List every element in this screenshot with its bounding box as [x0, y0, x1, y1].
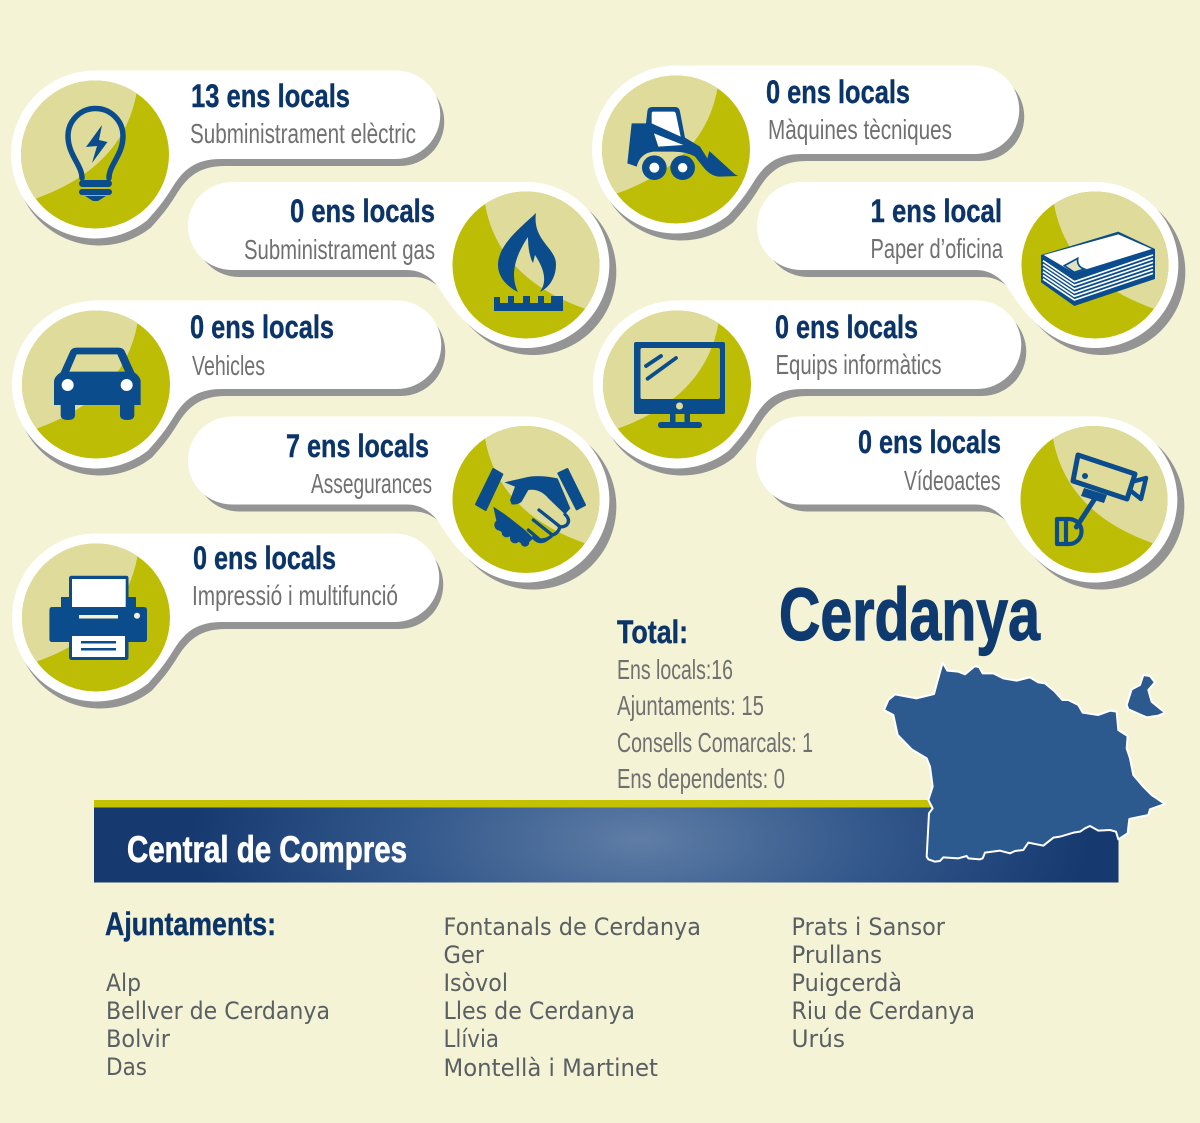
label: Vídeoactes — [904, 465, 1000, 496]
panel: subministrament elèctric — [11, 70, 444, 246]
banner title: Central de Compres — [127, 829, 407, 870]
icon: paper stack — [1041, 232, 1155, 306]
heading: 13 ens locals — [191, 78, 350, 114]
panel: vídeoactes — [756, 416, 1184, 589]
panel: equips informàtics — [593, 300, 1026, 476]
municipalities column 3: Prullans — [792, 941, 882, 969]
bubble shape — [12, 300, 445, 476]
label: Equips informàtics — [776, 349, 942, 380]
region title: Cerdanya — [779, 573, 1041, 656]
icon: loader machine — [627, 107, 738, 180]
label: Impressió i multifunció — [192, 580, 398, 611]
municipalities column 1: Das — [106, 1053, 147, 1081]
municipalities column 2: Montellà i Martinet — [444, 1054, 658, 1082]
municipalities column 1 — [106, 969, 330, 1081]
municipalities column 3: Riu de Cerdanya — [792, 997, 975, 1025]
bubble shape — [12, 534, 443, 708]
map of Cerdanya — [884, 663, 1165, 862]
municipalities column 2: Ger — [444, 941, 484, 969]
icon: computer monitor — [634, 342, 725, 428]
bubble shape — [188, 182, 616, 355]
municipalities column 1: Bellver de Cerdanya — [106, 997, 330, 1025]
total: consells comarcals: Consells Comarcals: 1 — [617, 727, 813, 758]
municipalities column 3: Puigcerdà — [792, 969, 902, 997]
heading: 0 ens locals — [858, 424, 1001, 460]
heading: 0 ens locals — [193, 540, 336, 576]
municipalities column 1: Bolvir — [106, 1025, 170, 1053]
icon: video camera — [1057, 455, 1146, 544]
heading: 0 ens locals — [766, 74, 910, 110]
icon: gas flame — [494, 213, 563, 311]
bubble shape — [592, 66, 1024, 241]
banner: central de compres — [94, 800, 1118, 882]
municipalities column 2 — [444, 913, 701, 1082]
total: ens locals: Ens locals:16 — [617, 654, 733, 685]
label: Subministrament elèctric — [190, 118, 416, 149]
totals block — [617, 614, 813, 794]
panel: subministrament gas — [188, 182, 616, 355]
list heading: Ajuntaments: — [105, 906, 276, 942]
municipalities column 2: Fontanals de Cerdanya — [444, 913, 701, 941]
label: Màquines tècniques — [768, 114, 952, 145]
municipalities column 3: Prats i Sansor — [792, 913, 945, 941]
panel: assegurances — [188, 416, 616, 589]
heading: 0 ens locals — [290, 193, 435, 229]
bubble shape — [757, 182, 1185, 355]
panel: paper d'oficina — [757, 182, 1185, 355]
bubble shape — [593, 300, 1026, 476]
heading: 0 ens locals — [190, 309, 334, 345]
label: Assegurances — [311, 468, 432, 499]
icon: handshake — [476, 469, 585, 547]
label: Subministrament gas — [244, 234, 435, 265]
municipalities column 3 — [792, 913, 975, 1053]
heading: 1 ens local — [870, 193, 1002, 229]
bubble shape — [11, 70, 444, 246]
bubble shape — [188, 416, 616, 589]
heading: 0 ens locals — [775, 309, 918, 345]
municipalities column 2: Llívia — [444, 1025, 499, 1053]
icon: light bulb — [68, 108, 123, 201]
total: ens dependents: Ens dependents: 0 — [617, 763, 785, 794]
panel: impressió i multifunció — [12, 534, 443, 708]
panel: màquines tècniques — [592, 66, 1024, 241]
total: ajuntaments: Ajuntaments: 15 — [617, 690, 764, 721]
totals heading: Total: — [617, 614, 688, 650]
municipalities column 3: Urús — [792, 1025, 845, 1053]
label: Paper d’oficina — [870, 233, 1003, 264]
municipalities column 2: Isòvol — [444, 969, 508, 997]
heading: 7 ens locals — [286, 428, 429, 464]
label: Vehicles — [192, 350, 265, 381]
icon: car — [54, 348, 141, 420]
municipalities column 2: Lles de Cerdanya — [444, 997, 635, 1025]
municipalities column 1: Alp — [106, 969, 141, 997]
icon: printer — [49, 576, 147, 660]
bubble shape — [756, 416, 1184, 589]
panel: vehicles — [12, 300, 445, 476]
